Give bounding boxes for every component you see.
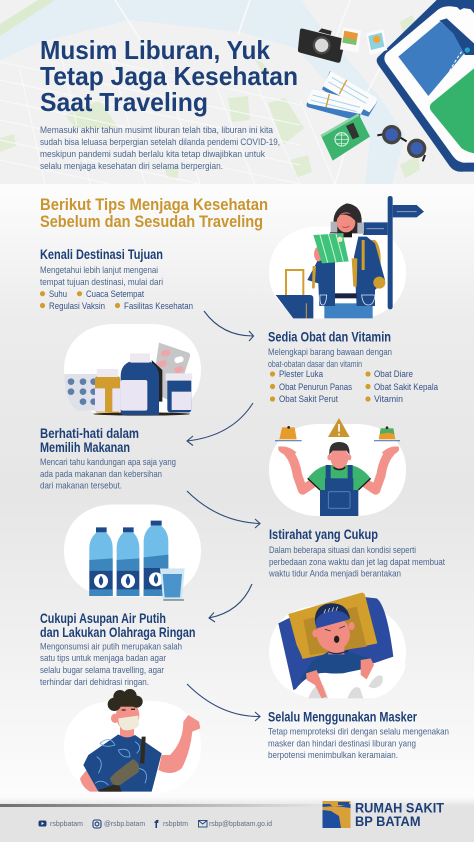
arrow: destinasi to obat: [204, 311, 254, 341]
tip: sedia obat: Obat Penurun Panas: [279, 382, 352, 392]
arrow: obat to makanan: [187, 403, 253, 446]
tip: sedia obat: [268, 330, 438, 404]
tip: masker: Selalu Menggunakan Masker: [268, 710, 418, 724]
tip: air putih: terhindar dari dehidrasi ringan.: [40, 677, 149, 688]
section heading: [40, 196, 268, 231]
title: Tetap Jaga Kesehatan: [40, 61, 298, 91]
icon: ticket back: [322, 71, 377, 117]
icon: suitcase: [377, 0, 474, 172]
tip: kenali destinasi: tempat tujuan destinasi, mulai dari: [40, 277, 163, 288]
tip: air putih: satu tips untuk menjaga badan agar: [40, 653, 166, 664]
intro text: [40, 125, 280, 172]
title: Saat Traveling: [40, 87, 208, 117]
tip: air putih: [40, 611, 196, 688]
tip: masker: [268, 710, 449, 761]
tip: berhati-hati: dari makanan tersebut.: [40, 480, 122, 492]
intro text: selalu menjaga kesehatan diri selama berpergian.: [40, 161, 223, 172]
illustration: man with mask: [64, 689, 201, 793]
logo: rumah sakit bp batam: RUMAH SAKIT: [355, 800, 444, 816]
tip: istirahat: [268, 527, 445, 580]
tip: sedia obat: Melengkapi barang bawaan dengan: [268, 347, 392, 358]
arrow: air putih to masker: [187, 684, 260, 721]
illustration: medicine: [64, 324, 201, 416]
tip: kenali destinasi: [40, 247, 193, 311]
footer social links: rsbpbatam: [50, 819, 83, 828]
tip: air putih: Cukupi Asupan Air Putih: [40, 611, 166, 626]
icon: ticket front: [307, 88, 365, 118]
tip: sedia obat: Plester Luka: [279, 369, 323, 379]
icon: sunglasses: [377, 125, 426, 161]
tip: istirahat: Istirahat yang Cukup: [269, 527, 378, 542]
intro text: sudah bisa leluasa berpergian setelah dilanda pendemi COVID-19,: [40, 137, 280, 148]
logo: rumah sakit bp batam: [322, 800, 444, 829]
tip: kenali destinasi: Cuaca Setempat: [86, 289, 144, 299]
intro text: Memasuki akhir tahun musimt liburan telah tiba, liburan ini kita: [40, 125, 274, 136]
title: Musim Liburan, Yuk: [40, 35, 271, 65]
section heading: Sebelum dan Sesudah Traveling: [40, 213, 263, 231]
icon: instagram: [93, 820, 101, 828]
arrow: istirahat to air putih: [209, 584, 252, 622]
tip: kenali destinasi: Suhu: [49, 289, 67, 299]
icon: camera: [298, 28, 345, 63]
intro text: meskipun pandemi sudah berlalu kita tetap diwajibkan untuk: [40, 149, 265, 160]
header map background: [0, 0, 474, 184]
header travel illustrations: [298, 0, 474, 172]
tip: air putih: dan Lakukan Olahraga Ringan: [40, 625, 196, 640]
tip: istirahat: perbedaan zona waktu dan jet lag dapat membuat: [269, 557, 445, 568]
logo: rumah sakit bp batam: BP BATAM: [355, 813, 420, 829]
footer social links: rsbp@bpbatam.go.id: [209, 819, 272, 828]
page background: [0, 183, 474, 808]
arrow: makanan to istirahat: [187, 491, 260, 528]
footer social links: @rsbp.batam: [104, 819, 145, 828]
tip: kenali destinasi: Fasilitas Kesehatan: [124, 301, 193, 311]
illustration: man choosing food: [269, 418, 406, 516]
tip: sedia obat: Sedia Obat dan Vitamin: [268, 330, 391, 344]
icon: youtube: [38, 820, 46, 826]
illustration: sleeping man: [269, 593, 406, 698]
tip: masker: berpotensi menimbulkan keramaian.: [268, 750, 398, 761]
icon: photo one: [340, 27, 361, 52]
tip: istirahat: waktu tidur Anda menjadi berantakan: [268, 568, 401, 580]
icon: facebook: [154, 820, 158, 828]
icon: photo two: [366, 29, 387, 55]
icon: email: [198, 820, 207, 827]
illustration: water bottles: [64, 504, 201, 600]
tip: berhati-hati: [40, 426, 176, 492]
tip: berhati-hati: ada pada makanan dan kebersihan: [40, 469, 162, 480]
tip: kenali destinasi: Regulasi Vaksin: [49, 301, 105, 311]
tip: kenali destinasi: Kenali Destinasi Tujuan: [40, 247, 163, 262]
icon: passport: [321, 113, 370, 161]
tip: sedia obat: Obat Sakit Perut: [279, 394, 338, 404]
illustration: traveller with map: [269, 196, 424, 318]
footer social links: rsbpbtm: [163, 819, 188, 828]
title: [40, 35, 298, 117]
tip: masker: masker dan hindari destinasi liburan yang: [268, 738, 416, 750]
tip: sedia obat: Obat Diare: [374, 369, 413, 379]
tip: air putih: Mengonsumsi air putih merupakan salah: [40, 642, 182, 652]
tip: sedia obat: Obat Sakit Kepala: [374, 382, 438, 392]
footer social links: [38, 819, 272, 828]
tip: istirahat: Dalam beberapa situasi dan kondisi seperti: [269, 545, 416, 556]
tip: berhati-hati: Memilih Makanan: [40, 440, 130, 455]
footer band: [0, 796, 474, 842]
tip: berhati-hati: Mencari tahu kandungan apa saja yang: [40, 457, 176, 468]
tip: sedia obat: obat-obatan dasar dan vitamin: [268, 359, 362, 370]
tip: berhati-hati: Berhati-hati dalam: [40, 426, 139, 441]
section heading: Berikut Tips Menjaga Kesehatan: [40, 196, 268, 214]
tip: sedia obat: Vitamin: [374, 394, 403, 404]
tip: kenali destinasi: Mengetahui lebih lanjut mengenai: [40, 265, 158, 276]
tip: air putih: selalu bugar selama travelling, agar: [40, 665, 164, 676]
